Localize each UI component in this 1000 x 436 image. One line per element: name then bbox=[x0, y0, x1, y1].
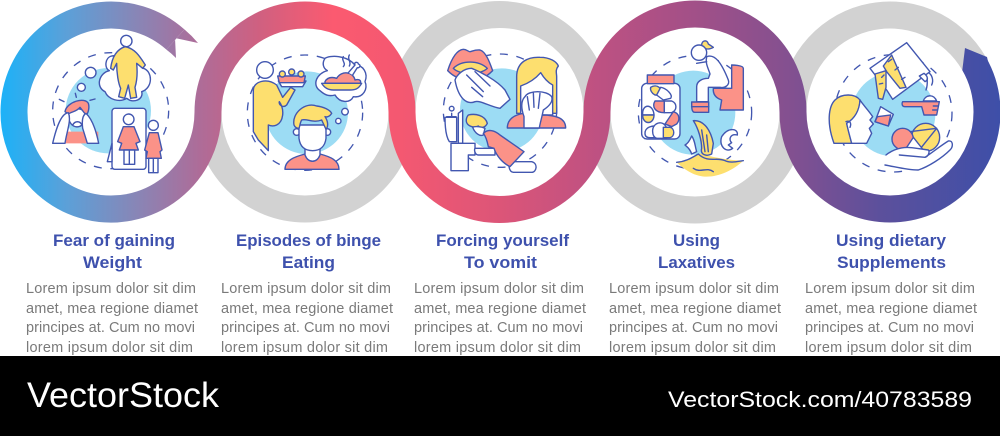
icon: episodes of binge eating bbox=[247, 55, 366, 170]
heading: fear of gaining weight bbox=[53, 232, 175, 272]
icon: using laxatives bbox=[638, 41, 752, 177]
body text 1: amet, mea regione diamet bbox=[26, 301, 198, 317]
grey wave band bbox=[208, 15, 974, 210]
body text 5: amet, mea regione diamet bbox=[805, 301, 977, 317]
footer band bbox=[0, 356, 1000, 436]
body text 1 bbox=[26, 281, 198, 356]
heading: using dietary supplements: Using dietary bbox=[836, 232, 947, 250]
heading: forcing yourself to vomit: Forcing yourself bbox=[436, 232, 570, 250]
body text 3 bbox=[414, 281, 586, 356]
heading: fear of gaining weight: Weight bbox=[83, 254, 143, 272]
body text 1: Lorem ipsum dolor sit dim bbox=[26, 281, 196, 297]
heading: episodes of binge eating: Eating bbox=[282, 254, 335, 272]
heading: using laxatives: Using bbox=[673, 232, 720, 250]
body text 3: principes at. Cum no movi bbox=[414, 320, 583, 336]
body text 5 bbox=[805, 281, 977, 356]
body text 5: lorem ipsum dolor sit dim bbox=[805, 340, 972, 356]
body text 4: lorem ipsum dolor sit dim bbox=[609, 340, 776, 356]
body text 2: Lorem ipsum dolor sit dim bbox=[221, 281, 391, 297]
heading: episodes of binge eating bbox=[236, 232, 381, 272]
body text 4: amet, mea regione diamet bbox=[609, 301, 781, 317]
icon: forcing yourself to vomit bbox=[443, 49, 566, 172]
gradient wave band with arrowheads bbox=[14, 14, 990, 210]
heading: using laxatives bbox=[658, 232, 735, 272]
body text 2 bbox=[221, 281, 393, 356]
heading: using dietary supplements: Supplements bbox=[837, 254, 946, 272]
column 2 text bbox=[221, 232, 393, 356]
body text 3: lorem ipsum dolor sit dim bbox=[414, 340, 581, 356]
body text 5: principes at. Cum no movi bbox=[805, 320, 974, 336]
heading: fear of gaining weight: Fear of gaining bbox=[53, 232, 175, 250]
heading: using laxatives: Laxatives bbox=[658, 254, 735, 272]
body text 1: principes at. Cum no movi bbox=[26, 320, 195, 336]
body text 1: lorem ipsum dolor sit dim bbox=[26, 340, 193, 356]
body text 2: amet, mea regione diamet bbox=[221, 301, 393, 317]
body text 4 bbox=[609, 281, 781, 356]
wordmark: VectorStock bbox=[27, 376, 220, 415]
heading: episodes of binge eating: Episodes of binge bbox=[236, 232, 381, 250]
column 1 text bbox=[26, 232, 198, 356]
body text 2: lorem ipsum dolor sit dim bbox=[221, 340, 388, 356]
body text 3: amet, mea regione diamet bbox=[414, 301, 586, 317]
body text 2: principes at. Cum no movi bbox=[221, 320, 390, 336]
body text 4: Lorem ipsum dolor sit dim bbox=[609, 281, 779, 297]
body text 3: Lorem ipsum dolor sit dim bbox=[414, 281, 584, 297]
body text 5: Lorem ipsum dolor sit dim bbox=[805, 281, 975, 297]
column 5 text bbox=[805, 232, 977, 356]
heading: using dietary supplements bbox=[836, 232, 947, 272]
icon: using dietary supplements bbox=[829, 43, 952, 172]
heading: forcing yourself to vomit: To vomit bbox=[464, 254, 538, 272]
heading: forcing yourself to vomit bbox=[436, 232, 570, 272]
icon: fear of gaining weight bbox=[53, 35, 169, 173]
image reference url: VectorStock.com/40783589 bbox=[668, 387, 972, 412]
column 4 text bbox=[609, 232, 781, 356]
body text 4: principes at. Cum no movi bbox=[609, 320, 778, 336]
column 3 text bbox=[414, 232, 586, 356]
